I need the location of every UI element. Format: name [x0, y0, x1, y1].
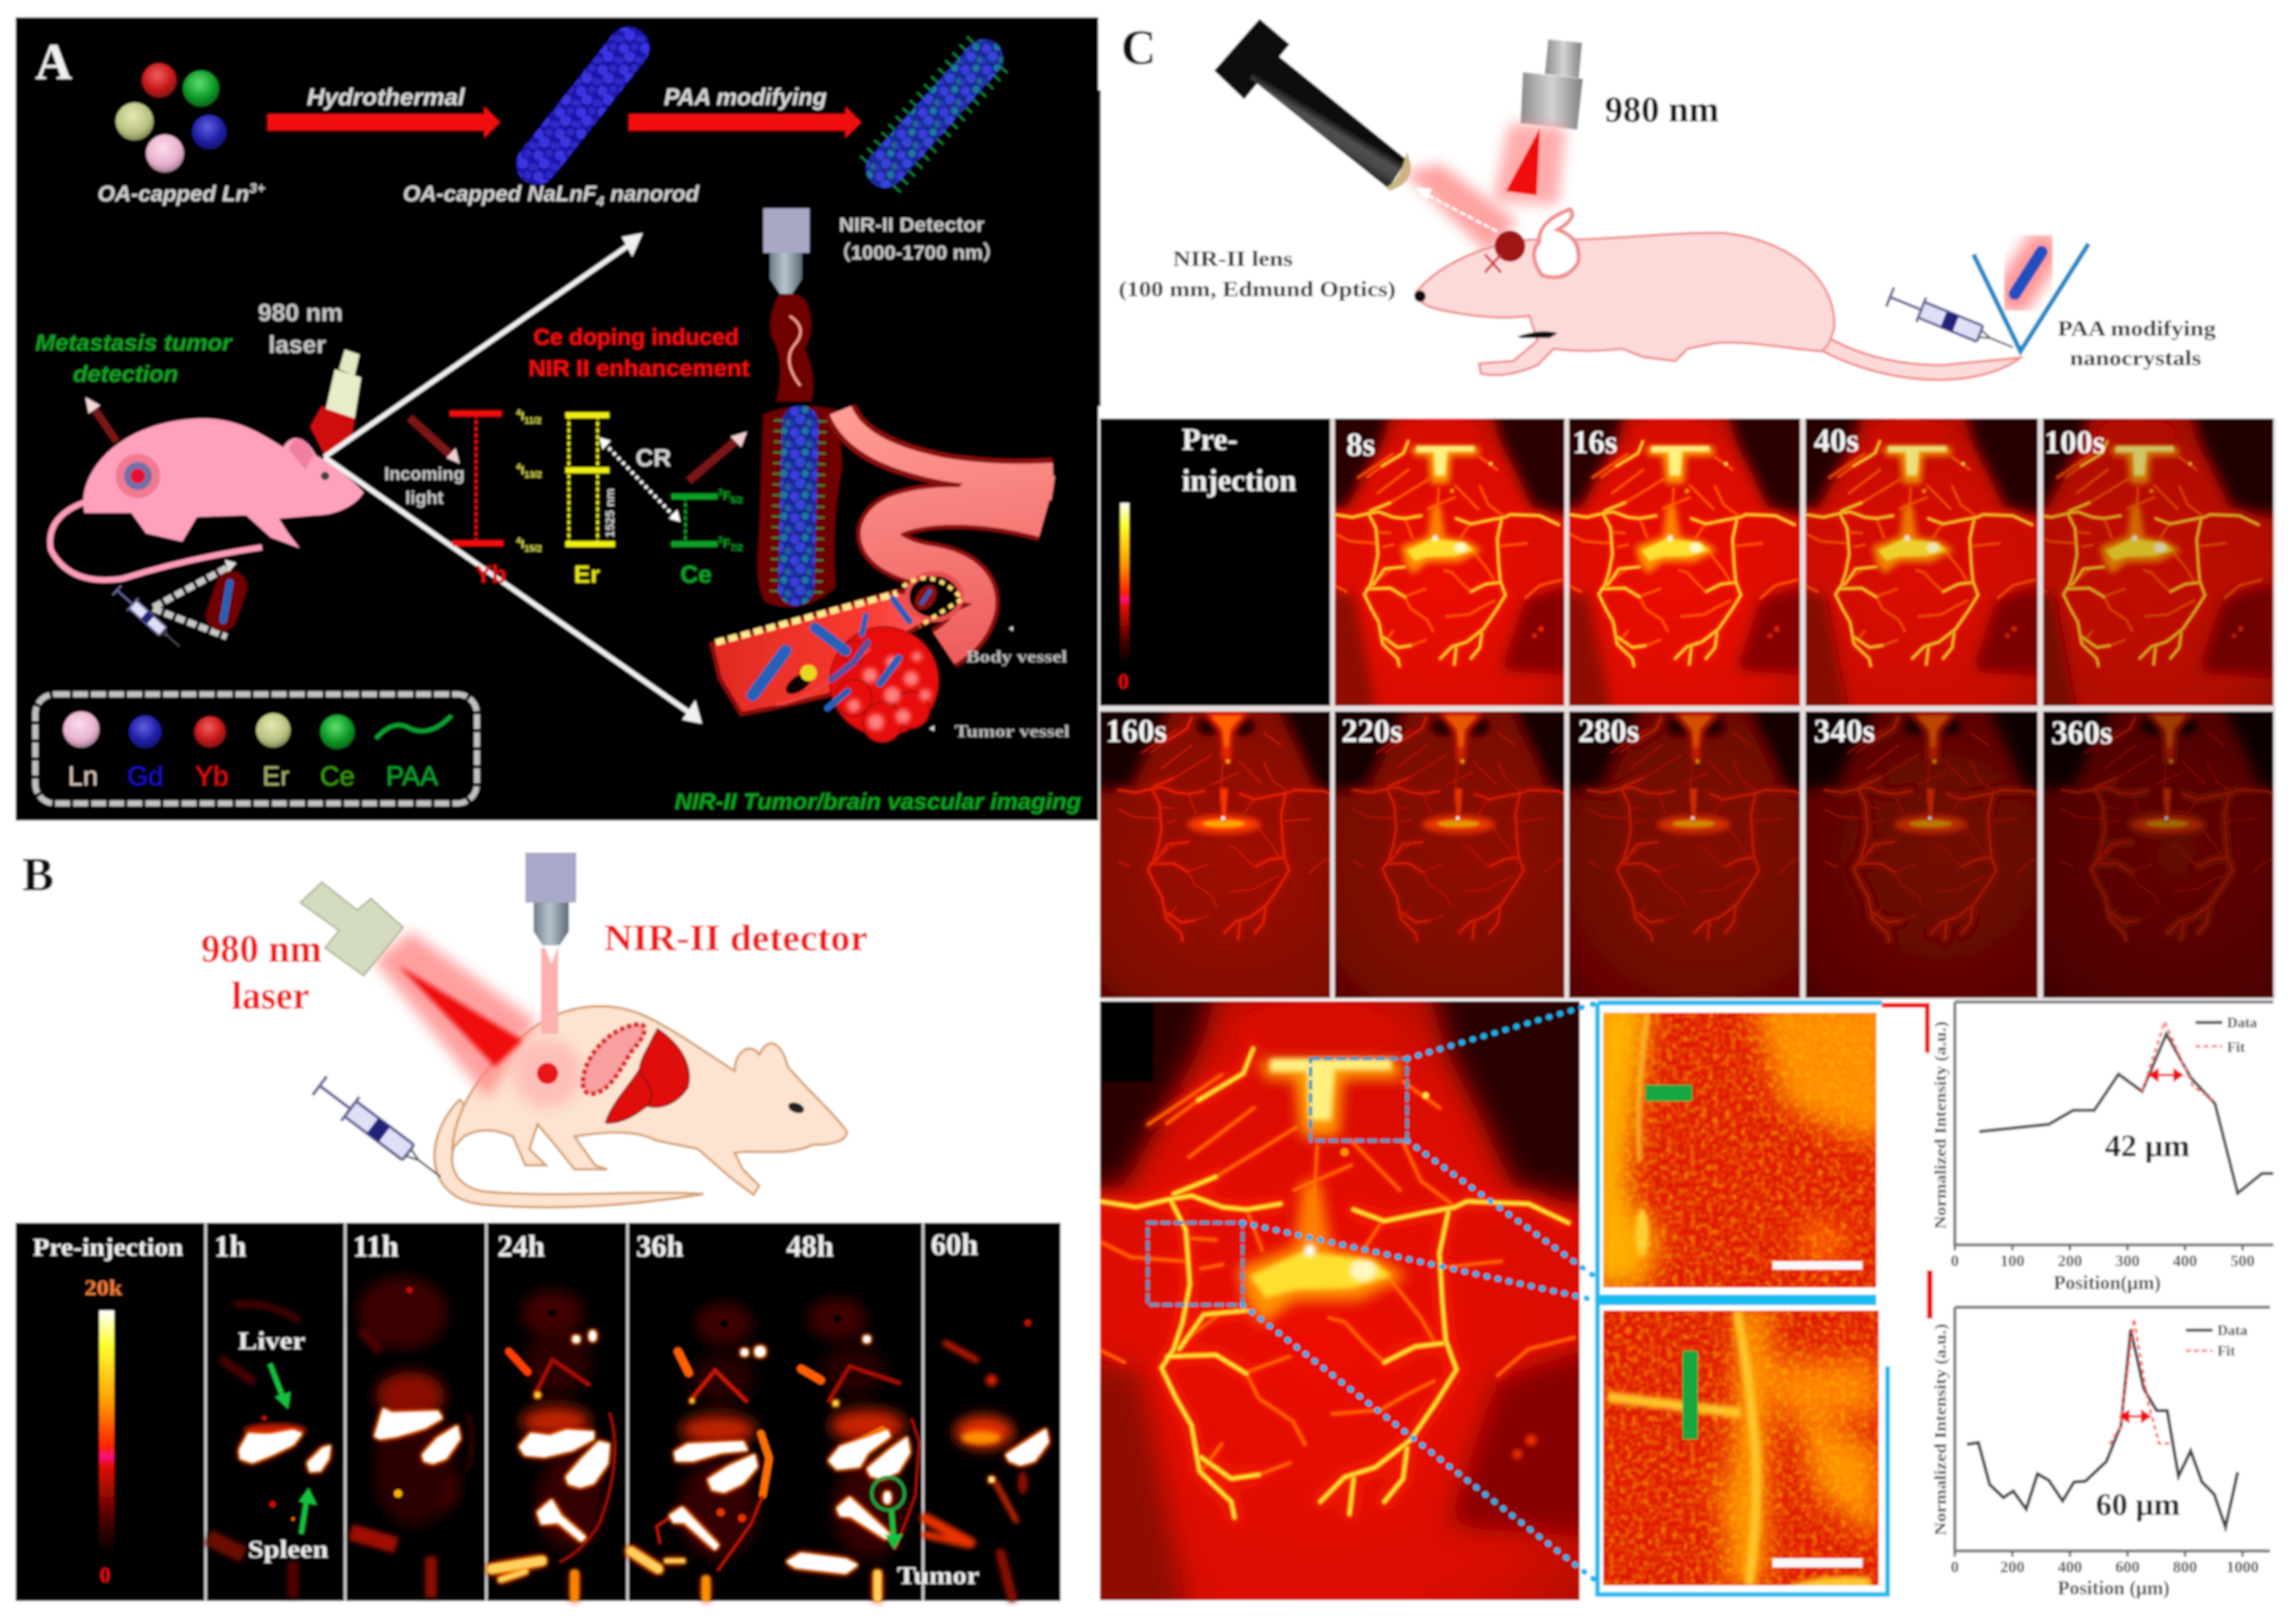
arrow: cross relaxation CR [599, 437, 680, 522]
label: PAA modifying nanocrystals [2058, 317, 2215, 370]
annotations: liver spleen tumor [238, 1326, 979, 1590]
axis labels: Normalized Intensity (a.u.) [1932, 1021, 1950, 1229]
panel B: liver, spleen and tumor imaging [16, 848, 1061, 1601]
icon: laser on mouse [310, 350, 361, 455]
label: Ce doping induced NIR II enhancement: Ce doping induced [534, 324, 739, 350]
FWHM arrow [2121, 1411, 2149, 1421]
image strip: whole-body imaging timeline [16, 1223, 1061, 1601]
frame 360s [2042, 711, 2275, 1000]
energy level diagram: Ce: F [723, 489, 731, 503]
value label: 42 μm [2105, 1129, 2190, 1164]
energy level diagram: Er: I [521, 409, 525, 423]
beam: 980 nm laser [374, 931, 537, 1098]
frame pre-injection: 0 [1118, 670, 1129, 693]
label: hydrothermal: Hydrothermal [307, 85, 465, 111]
FWHM arrow [2150, 1070, 2182, 1080]
mouse B [434, 1006, 847, 1207]
icon: 980 nm laser head [1520, 39, 1583, 130]
energy level diagram: Er: I [521, 464, 525, 478]
caption: OA-capped NaLnF4 nanorod: OA-capped NaLnF [403, 181, 597, 206]
axis labels: 1000 [2226, 1558, 2259, 1576]
time labels: 160s [1106, 713, 1167, 749]
label: 980 nm laser [258, 300, 343, 359]
value label: 60 μm [2096, 1488, 2180, 1522]
axis labels: Normalized Intensity (a.u.) [1932, 1324, 1950, 1535]
labels: body and tumor vessel [929, 626, 1070, 741]
axis labels: Position (μm) [2058, 1578, 2170, 1599]
annotations: liver spleen tumor: Spleen [248, 1535, 328, 1563]
legend: PAA [386, 761, 438, 791]
icon: NIR-II camera and lens [1214, 19, 1409, 189]
caption: OA-capped NaLnF4 nanorod: 4 [596, 194, 605, 209]
time labels: 340s [1814, 713, 1875, 749]
legend: Fit [2217, 1343, 2235, 1359]
legend [2196, 1014, 2257, 1055]
label: NIR-II detector range [831, 214, 1003, 264]
energy level diagram: Ce: F [723, 537, 731, 551]
signal beam [771, 294, 813, 401]
energy level diagram: Er: 1525 nm [603, 488, 617, 538]
legend: Fit [2227, 1039, 2245, 1055]
time labels: 40s [1814, 423, 1859, 459]
annotations: liver spleen tumor: Tumor [897, 1561, 979, 1590]
arrows: V branching from mouse [324, 236, 699, 721]
color scale: 0 [100, 1563, 110, 1587]
tumor site and organs [513, 1024, 689, 1123]
labels: body and tumor vessel: Tumor vessel [955, 721, 1070, 741]
chart: 42 um vessel profile [1932, 1002, 2273, 1294]
caption: OA-capped Ln3+: OA-capped Ln [98, 181, 250, 206]
frame 36h and 48h [630, 1297, 919, 1598]
label: NIR-II detector range: NIR-II Detector [839, 214, 984, 236]
label: PAA modifying nanocrystals: PAA modifying [2058, 317, 2215, 341]
axis labels: 800 [2173, 1558, 2197, 1576]
energy level diagram: Yb: Yb [475, 561, 506, 588]
energy level diagram: Er: 15/2 [525, 544, 542, 554]
label: 980 nm: 980 nm [1605, 90, 1719, 130]
panel C: brain vascular imaging [1003, 19, 2291, 1624]
frame 160s [1098, 711, 1331, 1000]
frame 8s [1333, 417, 1566, 707]
axis labels: 400 [2173, 1252, 2197, 1270]
frame pre-injection: Pre- [1182, 423, 1238, 457]
labels: timeline: Pre-injection [33, 1233, 183, 1261]
frame pre-injection: injection [1182, 464, 1296, 498]
frame pre-injection [1100, 419, 1330, 706]
energy level diagram: Er: 11/2 [525, 416, 542, 426]
axis labels: 0 [1951, 1252, 1959, 1270]
axis labels: 600 [2115, 1558, 2140, 1576]
energy level diagram: Er [516, 409, 617, 588]
energy level diagram: Yb [450, 414, 506, 588]
frame 280s [1568, 711, 1801, 1000]
axis labels: 200 [2000, 1558, 2024, 1576]
fit line [2142, 1022, 2215, 1101]
axis labels: 200 [2058, 1252, 2083, 1270]
caption: NIR-II tumor/brain vascular imaging: NIR-II Tumor/brain vascular imaging [675, 789, 1081, 814]
arrow and label: incoming light: Incoming [384, 464, 465, 484]
energy level diagram: Ce: 2 [718, 488, 723, 497]
labels: timeline: 48h [786, 1230, 834, 1264]
label: NIR-II lens: (100 mm, Edmund Optics) [1119, 277, 1395, 301]
inset frames in cyan and red [1597, 1003, 1930, 1594]
icon: OA-capped nanorod [537, 48, 629, 164]
label: PAA modifying: PAA modifying [664, 85, 827, 111]
label: NIR-II lens: NIR-II lens [1173, 247, 1293, 271]
legend: Er [263, 761, 290, 791]
icon: lanthanide ion spheres [116, 63, 227, 172]
data line [1967, 1329, 2238, 1527]
arrow and label: incoming light: light [406, 487, 444, 508]
label: NIR-II lens [1119, 247, 1395, 301]
energy level diagram: Ce [671, 488, 743, 588]
energy level diagram: Er: I [521, 538, 525, 551]
legend: Data [2217, 1322, 2247, 1338]
frame 11h [351, 1276, 472, 1598]
data line [1979, 1034, 2273, 1193]
icon: NIR-II detector [763, 208, 809, 294]
frame 60h [925, 1320, 1048, 1598]
energy level diagram: Er: 4 [516, 463, 521, 472]
caption: OA-capped Ln3+: 3+ [250, 181, 265, 196]
icon: nanocrystal capsule [222, 583, 231, 620]
chart: 60 um vessel profile [1932, 1307, 2270, 1599]
axis labels: 400 [2058, 1558, 2083, 1576]
label: 980 nm laser: 980 nm [258, 300, 343, 327]
mouse A with tumor [50, 419, 364, 580]
panel A: nanorod synthesis and mechanism [16, 17, 1098, 821]
label: Ce doping induced NIR II enhancement: NIR II enhancement [529, 355, 749, 381]
icon: syringe [1885, 285, 2018, 359]
energy level diagram: Er: 4 [516, 537, 521, 546]
arrow: PAA modifying [629, 107, 861, 138]
label: Ce doping induced NIR II enhancement [529, 324, 749, 381]
arrow: hydrothermal [268, 107, 500, 138]
axis labels: Position(μm) [2054, 1273, 2160, 1294]
legend: Gd [127, 761, 163, 791]
label: NIR-II detector range: （1000-1700 nm） [831, 242, 1003, 264]
arrow: emitted light from tumor [85, 397, 117, 441]
time labels: 100s [2044, 424, 2105, 460]
time labels: 220s [1341, 713, 1403, 749]
time labels: 16s [1573, 424, 1617, 460]
labels: timeline: 60h [931, 1228, 978, 1262]
illustration: body vessel tube [841, 410, 1053, 648]
frame 220s [1333, 711, 1566, 1000]
label: 980 nm laser [201, 927, 322, 1018]
labels: timeline: 36h [636, 1230, 684, 1264]
icon: syringe injection [112, 584, 185, 652]
legend [35, 694, 477, 803]
annotations: liver spleen tumor: Liver [238, 1326, 305, 1355]
frame 40s [1804, 417, 2039, 707]
panel letter B: B [22, 848, 54, 901]
labels: timeline [33, 1228, 978, 1264]
arrow: cross relaxation CR: CR [635, 445, 671, 472]
icon: syringe [311, 1074, 450, 1189]
legend: Ln [68, 761, 98, 791]
illustration: opened vessel and tumor [712, 574, 966, 742]
legend [2186, 1322, 2247, 1359]
icon: NIR-II detector [525, 853, 576, 1034]
label: metastasis tumor detection: detection [73, 361, 178, 387]
image: magnified brain vessels [1098, 1000, 1581, 1602]
time labels: 360s [2051, 715, 2113, 751]
inset 2: zoomed vessel [1603, 1302, 1879, 1590]
frame 100s [2042, 417, 2275, 707]
beam: emitted light to lens [1404, 164, 1517, 254]
frame 16s [1568, 417, 1801, 707]
legend: Ce [320, 761, 355, 791]
axis labels: 500 [2230, 1252, 2255, 1270]
label: 980 nm laser: laser [268, 332, 326, 359]
nanorod with halo [758, 406, 842, 607]
mouse C [1414, 209, 2020, 380]
icon: PAA-modified nanorod [880, 53, 989, 175]
caption: OA-capped NaLnF4 nanorod: nanorod [604, 181, 699, 206]
labels: timeline: 11h [353, 1230, 399, 1264]
energy level diagram: Er: 13/2 [525, 470, 542, 480]
image grid: brain vessel time series [1071, 395, 2291, 1027]
axis labels: 300 [2115, 1252, 2140, 1270]
energy level diagram: Er: Er [574, 561, 600, 588]
legend: Data [2227, 1014, 2257, 1031]
color scale: 20k [85, 1276, 123, 1300]
energy level diagram: Er: 4 [516, 409, 521, 418]
label: PAA modifying nanocrystals: nanocrystals [2070, 346, 2202, 370]
label: 980 nm laser: laser [231, 974, 309, 1018]
icon: laser head [300, 882, 403, 976]
axis labels: 0 [1951, 1558, 1959, 1576]
selection boxes and zoom lines [1148, 1003, 1597, 1582]
energy level diagram: Ce: Ce [680, 561, 712, 588]
icon: V tail vein with nanocrystal [1973, 244, 2088, 351]
labels: timeline: 1h [214, 1230, 246, 1264]
beam: 980 nm [1493, 123, 1566, 205]
label: metastasis tumor detection: Metastasis tumor [35, 330, 233, 355]
energy level diagram: Ce: 2 [718, 536, 723, 545]
label: NIR-II detector: NIR-II detector [604, 917, 868, 958]
panel letter C: C [1121, 21, 1156, 75]
time labels: 280s [1578, 713, 1639, 749]
arrows: dashed injection [152, 560, 236, 637]
frame 1h [208, 1304, 330, 1598]
labels: timeline: 24h [497, 1230, 545, 1264]
arrow and label: incoming light [384, 418, 465, 508]
axis labels [1932, 1324, 2259, 1599]
fit line [2110, 1319, 2170, 1444]
time labels: 8s [1346, 427, 1375, 463]
time labels [1106, 423, 2113, 751]
legend: Yb [195, 761, 228, 791]
label: metastasis tumor detection [35, 330, 233, 387]
panel letter A: A [35, 34, 72, 90]
color scale [85, 1276, 123, 1587]
inset 1: zoomed vessel [1587, 996, 1895, 1288]
label: 980 nm laser: 980 nm [201, 927, 322, 971]
frame 24h [492, 1290, 615, 1598]
frame 340s [1804, 711, 2039, 1000]
arrow: emitted NIR-II [689, 432, 747, 481]
labels: body and tumor vessel: Body vessel [966, 647, 1067, 666]
energy level diagram: Ce: 7/2 [731, 543, 743, 553]
axis labels: 100 [2000, 1252, 2024, 1270]
energy level diagram: Ce: 5/2 [731, 496, 743, 505]
axis labels [1932, 1021, 2255, 1294]
